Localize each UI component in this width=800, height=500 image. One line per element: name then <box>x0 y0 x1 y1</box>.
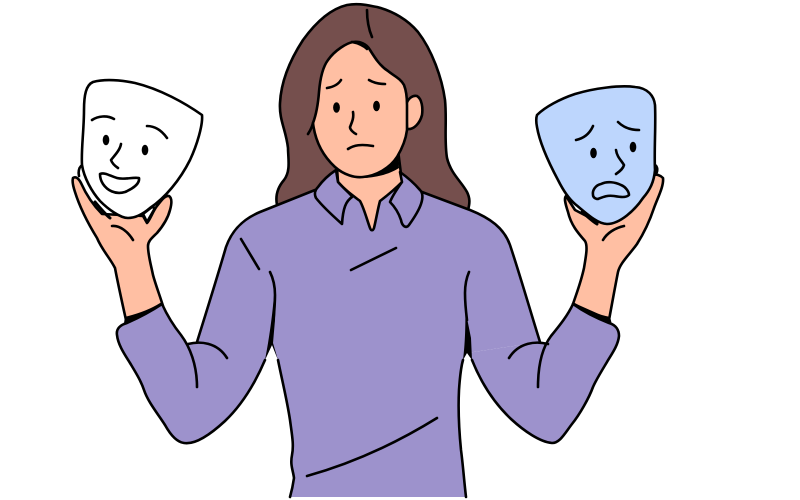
left thumb stub <box>79 166 81 176</box>
mask chin thick edge <box>582 212 597 224</box>
left cuff shadow <box>125 304 162 326</box>
eye sad right <box>630 142 636 152</box>
armhole left <box>270 272 275 325</box>
left elbow folds <box>162 304 227 387</box>
face <box>313 42 407 177</box>
right thumb stub <box>655 165 657 175</box>
sweater torso <box>196 190 540 497</box>
mouth sad <box>593 182 629 199</box>
left armpit shadow <box>265 295 278 360</box>
left mask shape <box>82 80 202 218</box>
nose happy <box>111 144 121 168</box>
left mask: happy <box>82 80 202 240</box>
left eye <box>333 102 340 113</box>
right sweater outline <box>422 192 540 342</box>
right forearm and hand <box>565 165 663 322</box>
hair parting <box>367 10 372 37</box>
collar right <box>390 172 422 227</box>
left sleeve outline <box>117 304 265 443</box>
ear <box>406 96 422 129</box>
eye happy left <box>103 135 109 145</box>
forehead hair highlight <box>352 42 367 49</box>
neck shadow <box>362 157 399 178</box>
left hand <box>73 177 171 320</box>
hair strand on cheek <box>308 123 313 134</box>
right armpit shadow <box>463 300 472 360</box>
eyebrows happy <box>92 116 167 138</box>
right hand <box>565 175 663 320</box>
palm crease right <box>603 226 624 240</box>
right elbow folds <box>509 304 573 387</box>
neck <box>337 150 402 230</box>
right mask shape <box>536 86 655 224</box>
left sweater outline <box>197 190 315 342</box>
right eye <box>373 101 380 111</box>
armhole right <box>465 272 469 320</box>
mouth <box>348 145 373 149</box>
palm crease left <box>112 226 133 240</box>
right mask: sad <box>536 86 655 240</box>
left sleeve fill <box>117 304 272 443</box>
eye happy right <box>142 145 148 155</box>
collar left <box>315 170 352 224</box>
eyebrows <box>327 80 385 88</box>
eye sad left <box>590 148 597 158</box>
chest creases <box>241 239 437 476</box>
mouth happy <box>100 173 139 193</box>
white patch between fingers <box>143 207 155 222</box>
right sleeve outline <box>472 304 619 443</box>
hair <box>276 4 469 240</box>
nose <box>350 112 356 134</box>
right sleeve fill <box>467 304 619 443</box>
torso right side line <box>459 360 466 497</box>
eyebrows sad <box>576 122 639 140</box>
torso left side line <box>278 360 294 497</box>
left forearm and hand <box>73 166 171 326</box>
right cuff shadow <box>574 304 610 322</box>
mask chin thick edge <box>95 202 110 218</box>
nose sad <box>616 150 624 174</box>
